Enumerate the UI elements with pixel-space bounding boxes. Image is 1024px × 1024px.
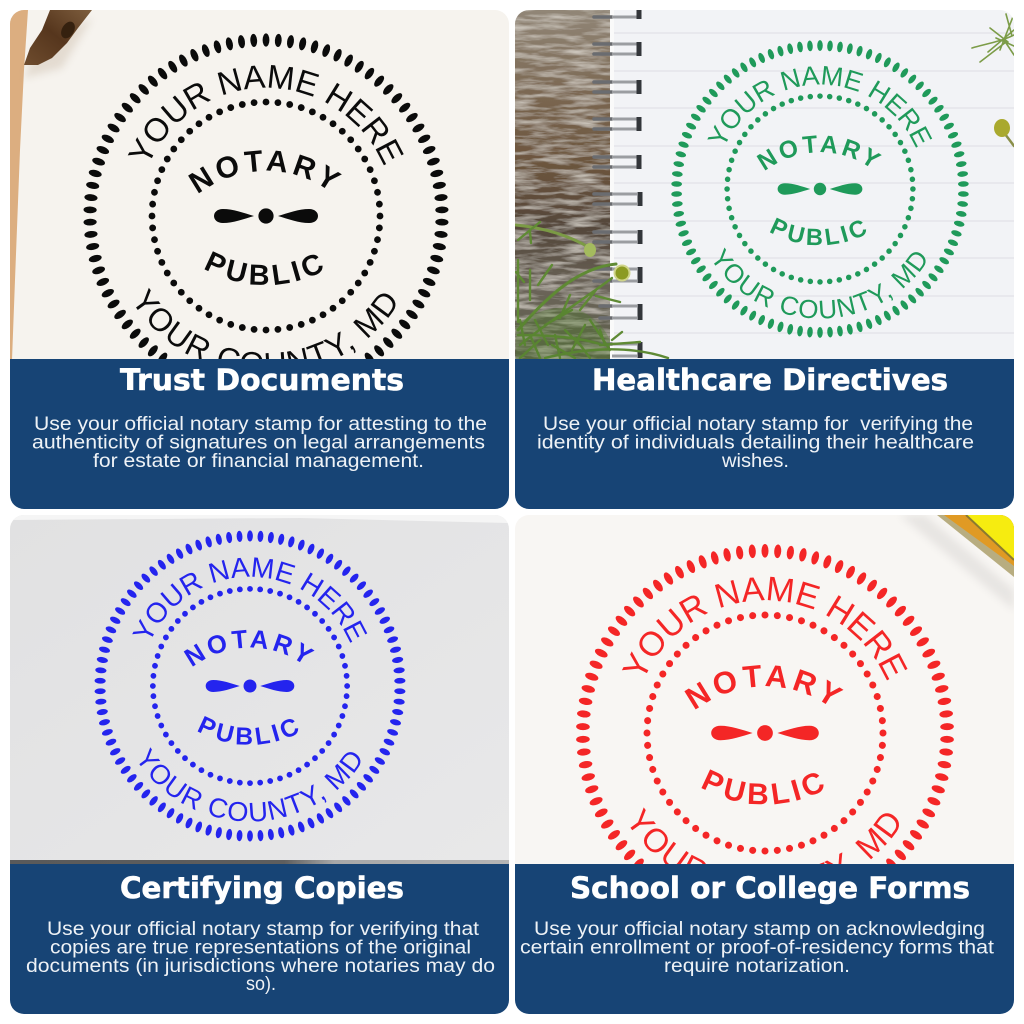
seal text: YOUR NAME HERE [132, 557, 368, 643]
flourish [778, 183, 862, 195]
panel: school or college forms [515, 515, 1014, 1014]
inner dotted ring [724, 93, 916, 285]
outer dotted ring [576, 544, 954, 864]
caption bar [10, 864, 509, 1014]
seal text: YOUR COUNTY, MD [136, 288, 396, 359]
seal text [622, 576, 908, 864]
stamp: red notary seal [576, 544, 954, 864]
photo background: paper and wood [10, 10, 509, 360]
outer dotted ring [89, 524, 411, 848]
body text: require notarization. [664, 956, 850, 977]
seal text: NOTARY [188, 150, 342, 194]
outer dotted ring [84, 33, 448, 359]
heading: School or College Forms [570, 871, 970, 905]
body text: for estate or financial management. [93, 451, 424, 472]
outer dotted ring [666, 34, 974, 344]
stamp: black notary seal [84, 33, 448, 359]
seal text: PUBLIC [770, 218, 866, 246]
body text: Use your official notary stamp for verifying the [543, 414, 973, 435]
photo background: notebook on wood with plants [515, 10, 1014, 360]
flourish [214, 208, 318, 224]
body text [520, 919, 995, 977]
seal text: YOUR COUNTY, MD [630, 808, 899, 864]
body text: certain enrollment or proof-of-residency forms that [520, 938, 995, 958]
body text: wishes. [721, 451, 789, 472]
inner dotted ring [644, 612, 886, 854]
body text: so). [246, 974, 276, 995]
body text: identity of individuals detailing their healthcare [537, 432, 974, 454]
panel: trust documents [10, 10, 509, 509]
seal text: PUBLIC [204, 251, 323, 285]
body text [26, 919, 495, 995]
photo background: paper and pencils [515, 515, 1014, 865]
seal text: PUBLIC [702, 769, 824, 804]
body text: authenticity of signatures on legal arrangements [32, 432, 485, 454]
caption bar [515, 359, 1014, 509]
seal text: NOTARY [184, 630, 314, 666]
body text: Use your official notary stamp on acknowledging [534, 919, 985, 940]
flourish [711, 725, 819, 741]
seal text [132, 557, 368, 822]
heading: Healthcare Directives [592, 363, 948, 397]
heading: Certifying Copies [120, 871, 404, 905]
inner dotted ring [150, 586, 350, 786]
spiral rings [594, 10, 640, 358]
flourish [206, 680, 294, 692]
caption bar [515, 864, 1014, 1014]
body text [32, 414, 487, 472]
seal text: YOUR NAME HERE [622, 576, 908, 680]
body text: Use your official notary stamp for verifying that [47, 919, 480, 940]
seal text: YOUR NAME HERE [128, 65, 404, 166]
seal text [707, 66, 932, 318]
seal text: YOUR NAME HERE [707, 66, 932, 148]
body text: documents (in jurisdictions where notaries may do [26, 956, 495, 977]
body text: copies are true representations of the original [50, 938, 471, 958]
body text: Use your official notary stamp for attesting to the [34, 414, 487, 435]
seal text: YOUR COUNTY, MD [139, 747, 360, 822]
body text [538, 416, 974, 467]
stamp: green notary seal [671, 40, 969, 338]
seal text: NOTARY [756, 135, 882, 170]
caption bar [10, 359, 509, 509]
panel: certifying copies [10, 515, 509, 1014]
inner dotted ring [148, 98, 384, 334]
stamp: blue notary seal [94, 530, 406, 842]
panel: healthcare directives [515, 10, 1014, 509]
seal text [128, 65, 404, 359]
plants [516, 222, 668, 358]
seal text: PUBLIC [198, 716, 298, 745]
seal text: NOTARY [684, 665, 844, 710]
seal text: YOUR COUNTY, MD [714, 248, 926, 318]
heading: Trust Documents [120, 363, 404, 397]
photo background: grey paper [10, 515, 509, 865]
